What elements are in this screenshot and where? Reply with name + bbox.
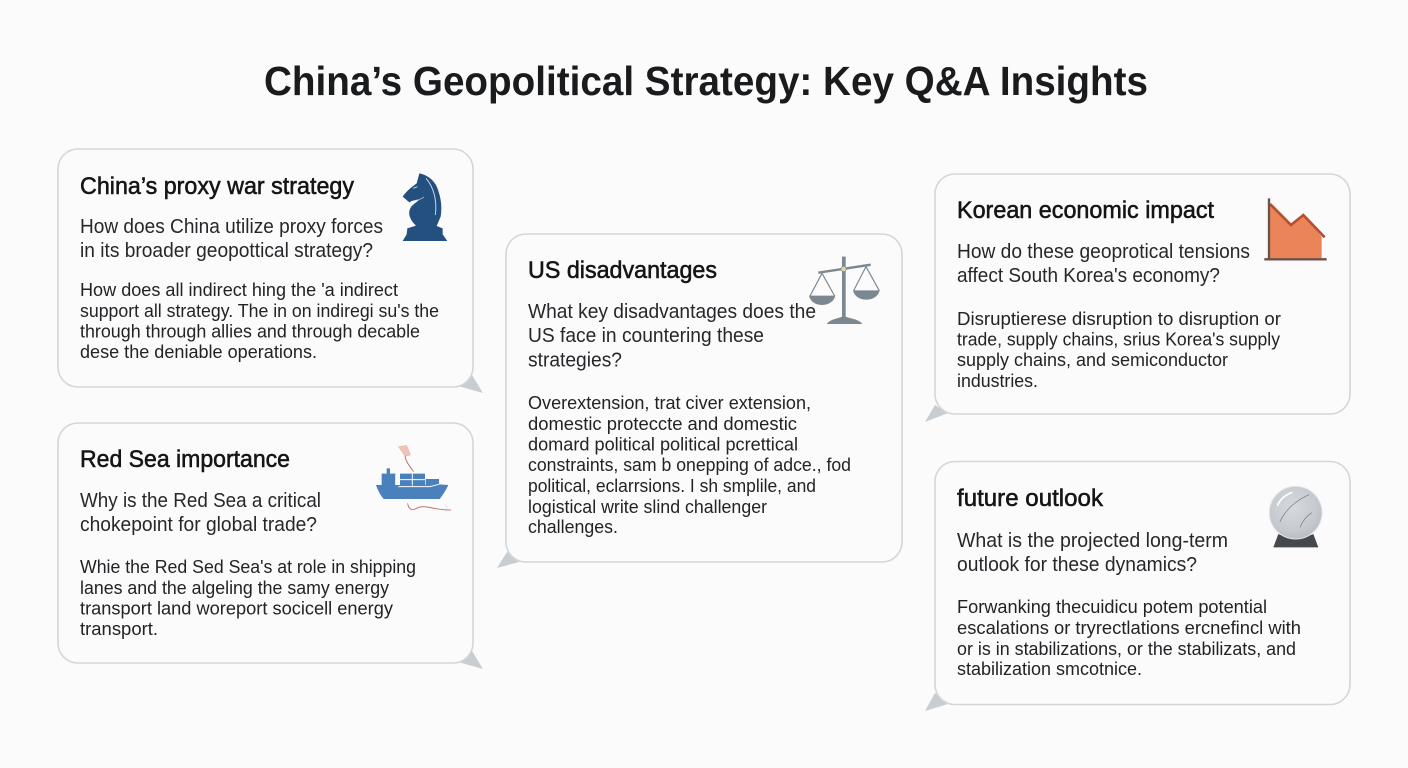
- title: China’s Geopolitical Strategy: Key Q&A Insights: [264, 58, 1148, 104]
- answer: US disadvantages: political, eclarrsions. I sh smplile, and: [528, 475, 816, 496]
- answer: US disadvantages: domard political political pcrettical: [528, 434, 798, 454]
- icon: crystal ball: [1269, 486, 1322, 547]
- answer: Red Sea: lanes and the algeling the samy energy: [80, 577, 390, 598]
- answer: future outlook: escalations or tryrectlations ercnefincl with: [957, 617, 1301, 638]
- answer: Korean economy: trade, supply chains, srius Korea's supply: [957, 328, 1281, 350]
- answer: proxy war: support all strategy. The in on indiregi su's the: [80, 300, 439, 321]
- question: Korean economy: How do these geoprotical tensions: [957, 240, 1250, 263]
- answer: Korean economy: [957, 308, 1281, 391]
- heading: proxy war: China’s proxy war strategy: [80, 173, 354, 200]
- question: Red Sea: chokepoint for global trade?: [80, 513, 317, 536]
- question: proxy war: [80, 215, 383, 262]
- panel: Red Sea importance: [58, 423, 483, 669]
- question: proxy war: in its broader geopottical strategy?: [80, 239, 373, 262]
- question: US disadvantages: What key disadvantages does the: [528, 300, 816, 323]
- heading: Korean economy: Korean economic impact: [957, 197, 1214, 224]
- icon: chess knight: [403, 173, 447, 241]
- question: US disadvantages: strategies?: [528, 348, 622, 372]
- answer: US disadvantages: Overextension, trat civer extension,: [528, 392, 811, 413]
- answer: proxy war: How does all indirect hing the 'a indirect: [80, 279, 398, 300]
- heading: Red Sea: Red Sea importance: [80, 446, 290, 473]
- answer: US disadvantages: [528, 392, 851, 537]
- answer: future outlook: or is in stabilizations, or the stabilizats, and: [957, 638, 1296, 659]
- answer: proxy war: dese the deniable operations.: [80, 341, 317, 362]
- answer: Korean economy: industries.: [957, 370, 1038, 391]
- question: future outlook: What is the projected long-term: [957, 529, 1228, 552]
- answer: Korean economy: Disruptierese disruption to disruption or: [957, 308, 1281, 329]
- answer: Red Sea: transport.: [80, 618, 158, 639]
- panel: future outlook: [925, 462, 1350, 711]
- question: US disadvantages: US face in countering these: [528, 324, 764, 347]
- answer: future outlook: [957, 596, 1301, 679]
- answer: proxy war: [80, 279, 439, 362]
- heading: US disadvantages: US disadvantages: [528, 257, 717, 284]
- icon: falling area chart: [1264, 198, 1327, 259]
- answer: Red Sea: Whie the Red Sed Sea's at role in shipping: [80, 556, 416, 577]
- icon: balance scales: [809, 257, 880, 324]
- heading: future outlook: future outlook: [957, 485, 1104, 512]
- panel: China's proxy war strategy: [58, 149, 483, 393]
- question: future outlook: outlook for these dynamics?: [957, 553, 1197, 576]
- answer: Red Sea: [80, 556, 416, 639]
- panel: Korean economic impact: [925, 174, 1350, 422]
- question: Red Sea: [80, 489, 321, 536]
- answer: Red Sea: transport land woreport socicell energy: [80, 598, 394, 618]
- answer: US disadvantages: domestic proteccte and domestic: [528, 413, 797, 434]
- question: US disadvantages: [528, 300, 816, 372]
- question: proxy war: How does China utilize proxy forces: [80, 215, 383, 238]
- answer: Korean economy: supply chains, and semiconductor: [957, 349, 1228, 370]
- question: Korean economy: affect South Korea's economy?: [957, 264, 1220, 287]
- question: future outlook: [957, 529, 1228, 576]
- answer: US disadvantages: constraints, sam b onepping of adce., fod: [528, 454, 851, 475]
- answer: proxy war: through through allies and through decable: [80, 320, 420, 342]
- question: Red Sea: Why is the Red Sea a critical: [80, 489, 321, 512]
- icon: container ship: [376, 445, 451, 510]
- answer: future outlook: Forwanking thecuidicu potem potential: [957, 596, 1267, 617]
- answer: future outlook: stabilization smcotnice.: [957, 658, 1142, 679]
- panel: US disadvantages: [497, 234, 902, 568]
- answer: US disadvantages: challenges.: [528, 516, 618, 537]
- question: Korean economy: [957, 240, 1250, 287]
- answer: US disadvantages: logistical write slind challenger: [528, 496, 767, 517]
